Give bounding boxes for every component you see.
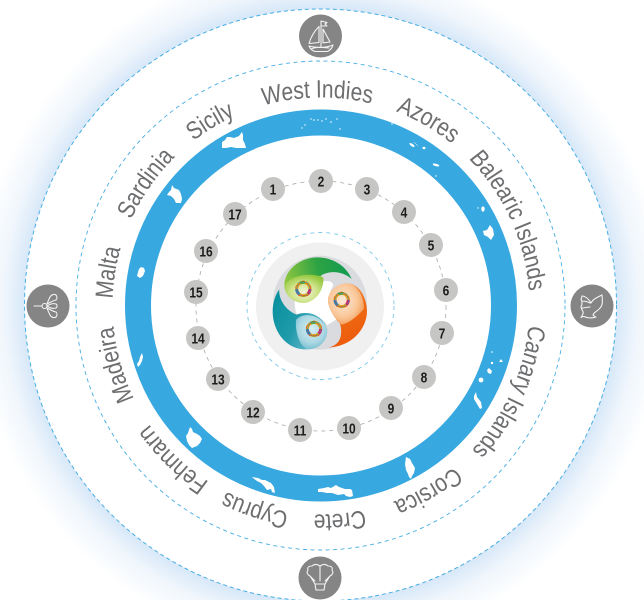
- mini rainbow emblem green: [296, 281, 311, 297]
- label: Cyprus: Cyprus: [222, 493, 286, 528]
- marker 3: [355, 177, 379, 201]
- icon: whale tail: [570, 284, 614, 328]
- marker 6: [434, 278, 458, 302]
- marker 11: [288, 418, 312, 442]
- island: Corsica: [405, 457, 415, 479]
- icon: brain helmet: [298, 556, 342, 600]
- marker 13: 13: [211, 371, 225, 388]
- marker 17: [223, 202, 247, 226]
- label: West Indies: West Indies: [260, 80, 372, 104]
- marker 10: 10: [342, 420, 356, 437]
- marker 2: [309, 169, 333, 193]
- island: Sardinia: [167, 185, 182, 203]
- marker 14: [186, 326, 210, 350]
- marker 17: 17: [228, 206, 242, 223]
- marker 15: 15: [189, 284, 203, 301]
- label: Fehmarn: Fehmarn: [140, 425, 208, 495]
- center dashed ring: [247, 232, 394, 380]
- mini rainbow emblem teal: [306, 321, 322, 337]
- icon: lobster claw: [26, 284, 70, 328]
- marker 7: 7: [439, 325, 445, 342]
- marker 4: 4: [401, 204, 408, 221]
- marker 3: 3: [364, 181, 371, 198]
- marker 1: 1: [270, 181, 277, 198]
- marker 13: [206, 367, 230, 391]
- mini rainbow emblem orange: [334, 292, 349, 308]
- island: Cyprus: [252, 477, 275, 493]
- curved island labels: [96, 80, 546, 530]
- blue ring with islands: [137, 118, 504, 497]
- island: Balearic Islands: [432, 163, 494, 240]
- marker 5: 5: [428, 237, 435, 254]
- label: Sicily: Sicily: [186, 104, 232, 139]
- island: West Indies: [301, 118, 341, 130]
- marker 8: 8: [421, 369, 428, 386]
- label: Sardinia: Sardinia: [118, 150, 175, 218]
- label: Malta: Malta: [96, 248, 120, 298]
- marker 6: 6: [443, 282, 450, 299]
- marker 12: [241, 400, 265, 424]
- island: Sicily: [222, 132, 246, 148]
- marker 1: [261, 177, 285, 201]
- inner dashed ring: [76, 61, 565, 550]
- island: Malta: [137, 267, 145, 278]
- green swirl: [284, 257, 352, 303]
- marker 5: [419, 233, 443, 257]
- marker 16: 16: [199, 243, 213, 260]
- island: Crete: [318, 485, 353, 497]
- center swirl logo: [273, 256, 367, 350]
- marker 14: 14: [191, 330, 205, 347]
- marker 2: 2: [318, 173, 325, 190]
- label: Crete: Crete: [314, 511, 365, 530]
- island: Azores: [391, 123, 426, 149]
- island: Canary Islands: [474, 351, 503, 409]
- island: Madeira: [137, 353, 143, 367]
- label: Madeira: Madeira: [98, 326, 134, 404]
- marker 12: 12: [246, 404, 260, 421]
- numbered markers: [184, 169, 458, 442]
- label: Azores: Azores: [396, 98, 458, 142]
- marker 10: [337, 416, 361, 440]
- marker 9: 9: [388, 400, 395, 417]
- marker 11: 11: [294, 422, 307, 439]
- island: Fehmarn: [186, 427, 202, 448]
- label: Corsica: Corsica: [393, 470, 461, 512]
- icon: sailboat: [299, 14, 342, 58]
- teal swirl: [273, 289, 327, 349]
- label: Balearic Islands: Balearic Islands: [470, 149, 546, 290]
- marker 4: [392, 200, 416, 224]
- label: Canary Islands: Canary Islands: [473, 327, 545, 456]
- marker 16: [194, 239, 218, 263]
- center grey disc: [256, 242, 384, 370]
- marker 15: [184, 280, 208, 304]
- marker 7: [430, 321, 454, 345]
- dashed number ring: [196, 181, 446, 431]
- marker 8: [412, 365, 436, 389]
- marker 9: [379, 396, 403, 420]
- orange swirl: [328, 283, 367, 347]
